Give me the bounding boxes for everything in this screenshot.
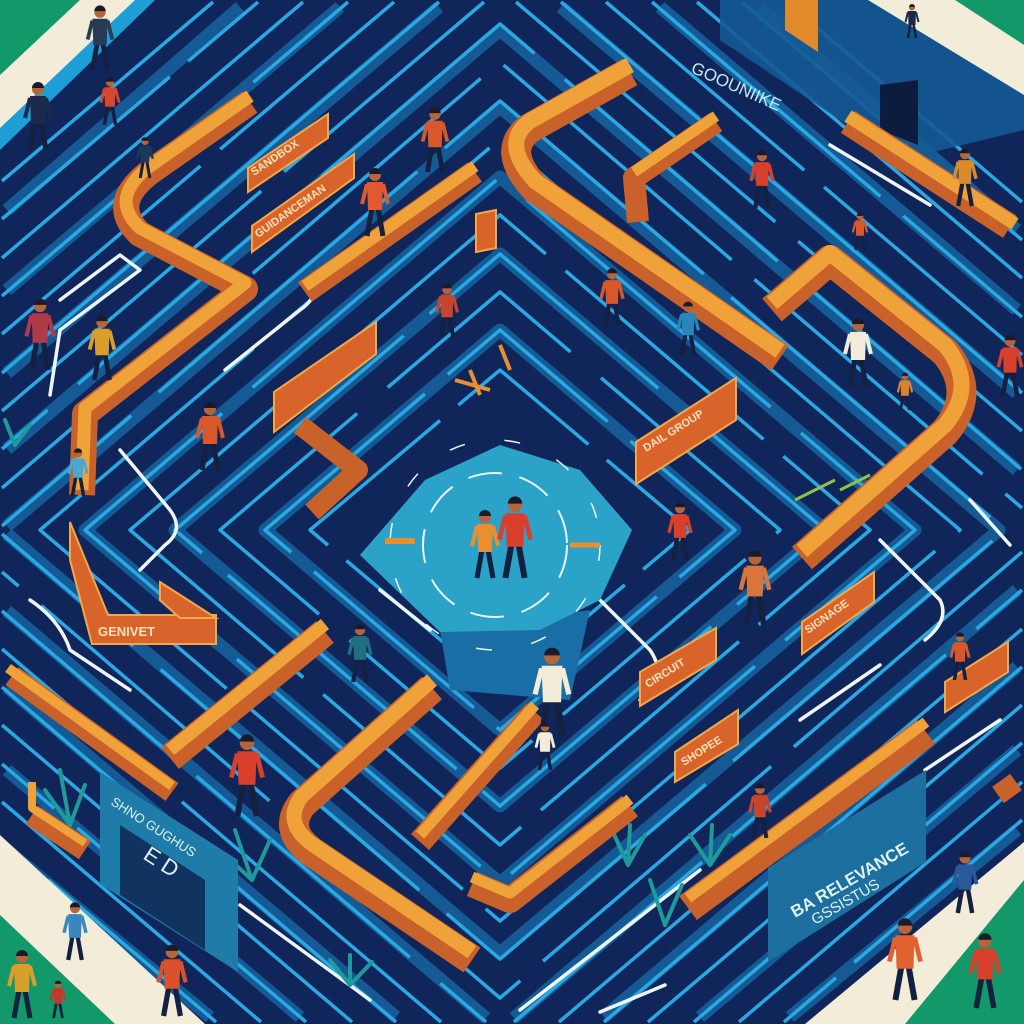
sign: right 3: SHOPEE — [679, 734, 724, 769]
corner: top left — [0, 0, 155, 150]
person — [423, 107, 447, 172]
sign: right 2 — [640, 628, 716, 706]
sign: far right — [945, 642, 1008, 712]
sign: center right — [636, 378, 736, 484]
sign: left mid — [274, 322, 376, 432]
blue panel: lower right: GSSISTUS — [808, 876, 883, 928]
sign: right 2: CIRCUIT — [643, 657, 688, 691]
sign: upper left 1: SANDBOX — [249, 137, 302, 178]
person — [101, 77, 119, 125]
person — [137, 137, 153, 178]
central figure right — [499, 496, 531, 578]
person — [437, 284, 457, 338]
top right building — [688, 0, 1024, 160]
person — [349, 624, 371, 682]
person — [889, 918, 921, 1000]
person — [69, 448, 87, 496]
person — [362, 168, 388, 236]
blue panel: lower left — [100, 772, 238, 972]
corner: top right — [868, 0, 1024, 95]
person — [601, 268, 623, 326]
person — [898, 373, 912, 410]
person — [88, 5, 112, 70]
sign: center right: DAIL GROUP — [641, 408, 706, 455]
person — [26, 299, 54, 370]
person — [751, 150, 773, 208]
corner: bottom right — [805, 842, 1024, 1024]
sign: upper left 2: GUIDANCEMAN — [253, 183, 328, 240]
person — [535, 648, 569, 736]
blue panel: lower left: E D — [139, 841, 184, 882]
person — [998, 335, 1022, 396]
sign: L shaped left — [70, 522, 216, 644]
person — [954, 148, 976, 206]
person — [845, 318, 871, 386]
person — [536, 722, 554, 770]
top right building: GOOUNIIKE — [688, 58, 784, 115]
person — [951, 632, 969, 680]
sign: right 1 — [802, 572, 874, 654]
corner: bottom left — [0, 835, 205, 1024]
person — [231, 734, 263, 816]
person — [25, 82, 51, 150]
person — [953, 852, 977, 913]
person — [197, 402, 223, 470]
sign: L shaped left: GENIVET — [98, 624, 155, 639]
sign: small upper center — [476, 210, 496, 252]
sign: upper left 1 — [248, 114, 328, 192]
blue panel: lower right: BA RELEVANCE — [788, 839, 912, 921]
person — [971, 933, 999, 1008]
person — [90, 315, 114, 380]
central figure left — [472, 510, 498, 578]
person — [669, 502, 691, 560]
sign: right 3 — [675, 710, 738, 782]
person — [741, 550, 769, 625]
person — [906, 4, 918, 38]
person — [158, 945, 186, 1016]
blue panel: lower left: SHNO GUGHUS — [108, 794, 199, 860]
person — [64, 902, 86, 960]
blue panel: lower right — [768, 770, 926, 962]
person — [678, 302, 698, 356]
person — [853, 213, 867, 250]
person — [750, 784, 770, 838]
sign: right 1: SIGNAGE — [803, 598, 851, 636]
foliage — [5, 345, 870, 985]
sign: upper left 2 — [252, 154, 354, 252]
signs — [70, 114, 1008, 782]
central plaza — [360, 440, 632, 700]
person — [51, 981, 65, 1018]
person — [9, 950, 35, 1018]
